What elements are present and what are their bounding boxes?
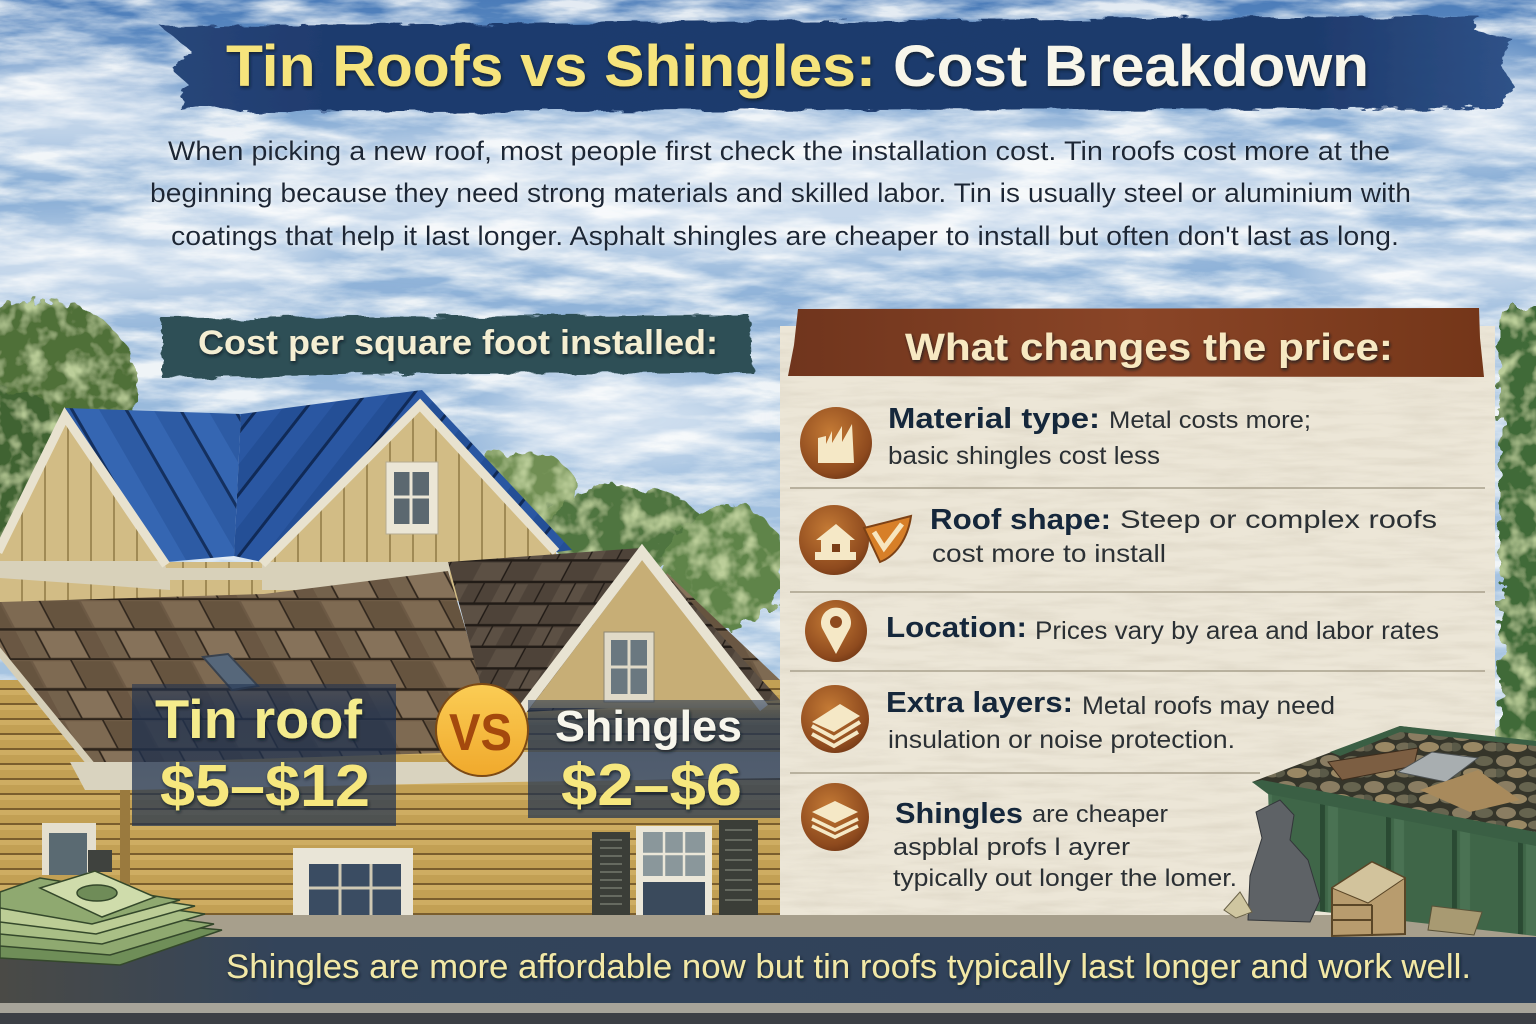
dormer gable wall (530, 560, 760, 708)
house illustration (0, 390, 780, 920)
trees: left (0, 300, 137, 570)
upper trim band (0, 561, 450, 590)
row: extra layers: insulation or noise protection. (888, 726, 1235, 754)
row: extra layers (801, 685, 1335, 754)
debris: wood scrap (1328, 748, 1418, 780)
left fascia trim (0, 648, 130, 768)
row: extra layers: Extra layers: (886, 687, 1073, 719)
row: roof shape: Roof shape: (930, 504, 1111, 536)
panel header (788, 308, 1484, 377)
shingles label: Shingles (555, 702, 742, 751)
back right shingle roof (640, 573, 780, 730)
row: location: Location: (886, 612, 1027, 644)
banner text: Cost per square foot installed: (198, 324, 718, 362)
crate with cash (1332, 862, 1405, 936)
shingles price: $2–$6 (561, 752, 742, 818)
intro paragraph: coatings that help it last longer. Asphalt shingles are cheaper to install but often don't last as long. (171, 221, 1399, 251)
blue metal roof (65, 390, 572, 562)
intro paragraph (150, 136, 1411, 251)
row: extra layers: Metal roofs may need (1082, 692, 1335, 720)
panel: what changes the price (780, 308, 1495, 918)
price overlay: tin roof (132, 684, 396, 826)
loose bills (1428, 906, 1482, 935)
dumpster full of old shingles (1224, 726, 1536, 936)
row: roof shape: Steep or complex roofs (1120, 506, 1437, 534)
dumpster rim (1252, 726, 1536, 846)
money stack (0, 871, 222, 965)
debris pile (1252, 726, 1536, 832)
vs badge: VS (449, 704, 512, 762)
top bill (40, 871, 155, 917)
bag (1248, 800, 1320, 922)
skylight (203, 654, 258, 690)
panel header: What changes the price: (905, 327, 1393, 369)
right window with shutters (592, 820, 758, 916)
centre window (293, 848, 413, 916)
main shingle roof (0, 571, 484, 764)
upper storey walls (0, 405, 560, 604)
vs badge (436, 684, 528, 776)
upper window (386, 462, 438, 534)
trees: right (1500, 310, 1536, 750)
row: shingles: typically out longer the lomer. (893, 865, 1237, 892)
footer text: Shingles are more affordable now but tin roofs typically last longer and work well. (226, 948, 1471, 986)
row: shingles (801, 783, 1237, 892)
row: shingles: are cheaper (1032, 801, 1168, 828)
title banner (160, 16, 1514, 112)
cost per square foot banner (162, 315, 752, 378)
row: location (805, 600, 1439, 662)
icon: stacked layers (801, 783, 869, 851)
row: shingles: Shingles (895, 798, 1023, 830)
trees: middle (475, 450, 785, 627)
tin roof label: Tin roof (155, 688, 363, 750)
left window (42, 823, 112, 875)
gable trim (0, 405, 556, 565)
price overlay: shingles (528, 700, 780, 818)
intro paragraph: When picking a new roof, most people first check the installation cost. Tin roofs cost more at the (168, 136, 1390, 166)
dormer window (604, 632, 654, 702)
left wing corner post (120, 790, 130, 915)
row: material type: Metal costs more; (1109, 407, 1311, 434)
row: roof shape: cost more to install (932, 540, 1166, 568)
title text: Tin Roofs vs Shingles: (226, 34, 876, 99)
icon: factory chart (800, 407, 872, 479)
row: material type: basic shingles cost less (888, 442, 1160, 470)
row: roof shape (799, 504, 1437, 575)
icon: map pin (805, 600, 867, 662)
title text (226, 34, 1369, 99)
dormer shingle roof (448, 548, 780, 712)
lower wall siding (0, 680, 780, 920)
row: shingles: aspblal profs l ayrer (893, 834, 1130, 861)
icon: layered sheets (801, 685, 869, 753)
row: location: Prices vary by area and labor rates (1035, 617, 1439, 645)
dumpster body (1268, 790, 1536, 936)
footer banner (0, 937, 1536, 1024)
intro paragraph: beginning because they need strong materials and skilled labor. Tin is usually steel or aluminium with (150, 178, 1411, 208)
tin roof price: $5–$12 (160, 753, 370, 819)
icon: house with check (799, 505, 911, 575)
title text: Cost Breakdown (893, 34, 1369, 99)
debris: tile stack (1420, 770, 1520, 812)
eave trim (70, 752, 780, 790)
row: material type: Material type: (888, 403, 1100, 435)
row: material type (800, 403, 1311, 479)
ground ledge (190, 915, 1536, 937)
debris: metal sheet (1398, 752, 1478, 782)
